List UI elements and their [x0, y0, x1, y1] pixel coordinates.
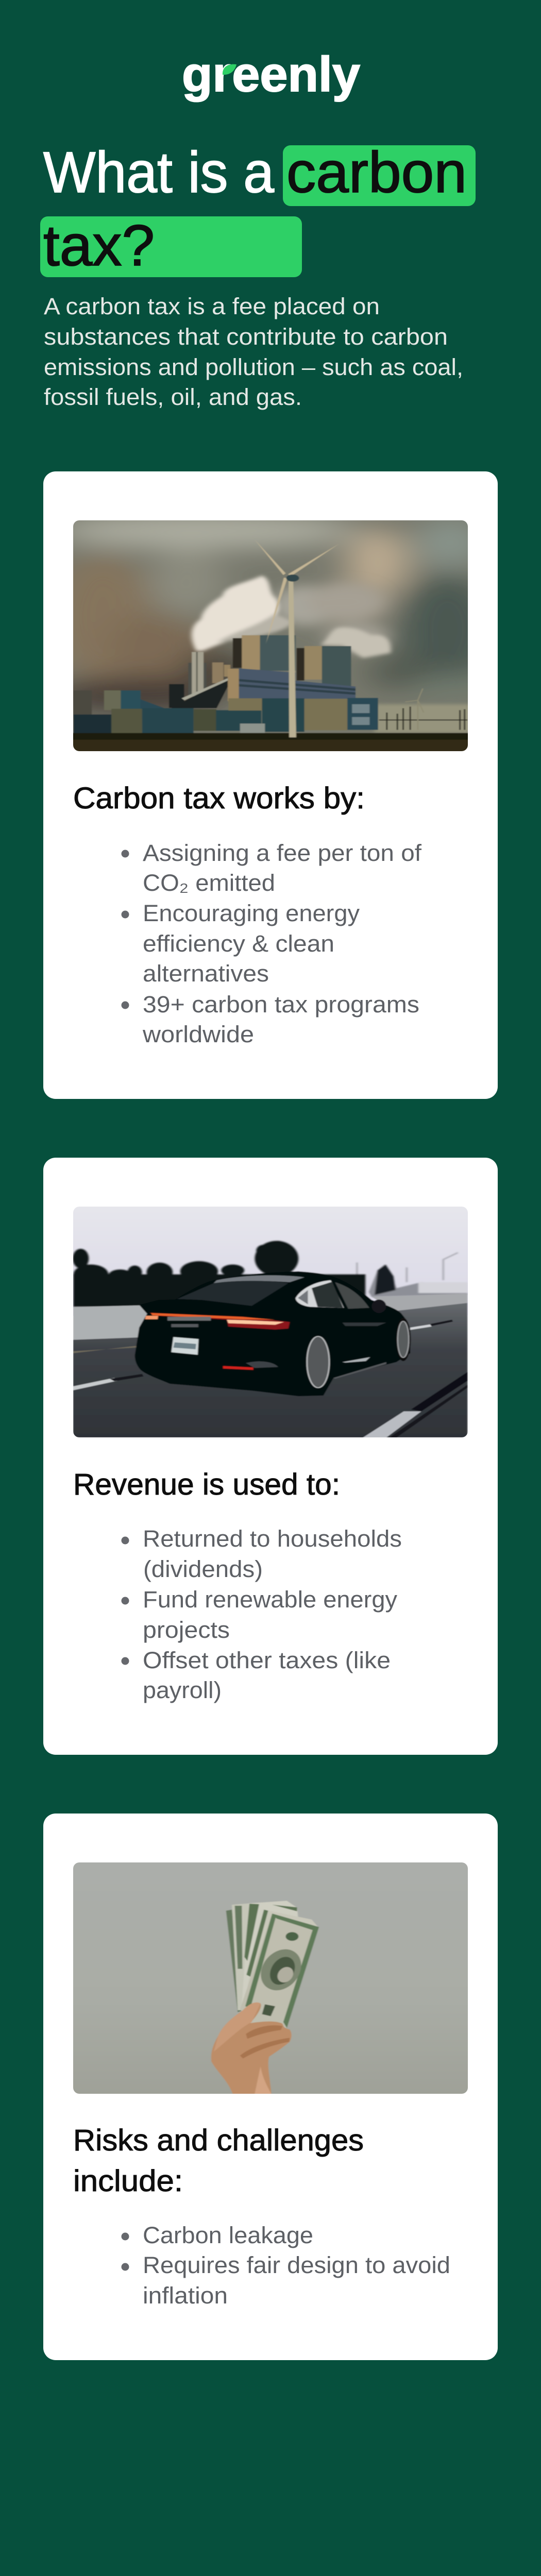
pylons: [379, 706, 467, 730]
bullet list: uses of revenue: (dividends): [143, 1556, 263, 1582]
tail lights: [149, 1313, 290, 1330]
bullet list: carbon tax mechanisms: Assigning a fee per ton of: [143, 840, 422, 866]
bullet list: risks: [122, 2222, 450, 2309]
bullet list: risks: Carbon leakage: [143, 2222, 313, 2248]
photo: power plant and wind turbine: [73, 520, 468, 751]
highlight: carbon: [283, 145, 476, 206]
lane stripes: [73, 1378, 117, 1390]
side windows: [296, 1280, 344, 1308]
card background: [43, 471, 498, 1099]
highlight: tax: [40, 216, 302, 277]
back bills: [226, 1910, 243, 2012]
front bill: [240, 1919, 312, 2028]
bullet list: uses of revenue: projects: [143, 1617, 230, 1643]
heading: risks and challenges include: include:: [73, 2164, 183, 2198]
tree silhouette: [73, 1241, 365, 1307]
rear window: [177, 1281, 289, 1306]
smoke plume bright part: [192, 575, 391, 658]
plant buildings: [73, 690, 92, 715]
heading: risks and challenges include: Risks and challenges: [73, 2124, 364, 2157]
roof sheen: [214, 1275, 305, 1283]
panel: carbon tax works by: [43, 471, 498, 1099]
badge text marks: [167, 1317, 211, 1320]
license plate: [172, 1337, 198, 1355]
small turbine: [405, 688, 424, 721]
bullet list: carbon tax mechanisms: CO₂ emitted: [143, 870, 275, 896]
bullet list: risks: inflation: [143, 2282, 228, 2309]
intro paragraph: [44, 293, 463, 410]
hand: [211, 2003, 292, 2094]
title: [40, 140, 476, 278]
ground: [71, 733, 471, 740]
photo: black car on highway: [71, 1206, 471, 1437]
bullet list: uses of revenue: Offset other taxes (like: [143, 1647, 391, 1673]
background roadside: [357, 1252, 467, 1297]
intro paragraph: fossil fuels, oil, and gas.: [44, 384, 302, 410]
intro paragraph: A carbon tax is a fee placed on: [44, 293, 380, 319]
mirror and door sheen: [371, 1299, 386, 1313]
bullet list: carbon tax mechanisms: efficiency & clean: [143, 930, 334, 957]
intro paragraph: substances that contribute to carbon: [44, 324, 448, 350]
intro paragraph: emissions and pollution – such as coal,: [44, 354, 463, 380]
horizon band: [375, 704, 471, 733]
icon: green leaf on logo: [223, 64, 236, 75]
card background: [43, 1158, 498, 1755]
panel: revenue is used to: [43, 1158, 498, 1755]
bullet list: uses of revenue: Fund renewable energy: [143, 1586, 398, 1613]
bullet list: carbon tax mechanisms: 39+ carbon tax programs: [143, 991, 419, 1018]
bullet list: carbon tax mechanisms: [122, 840, 422, 1047]
bullet list: carbon tax mechanisms: Encouraging energy: [143, 900, 360, 926]
photo: hand holding dollar bills: [71, 1861, 471, 2095]
main turbine: [289, 580, 296, 737]
road surface: [73, 1303, 467, 1437]
bullet list: uses of revenue: Returned to households: [143, 1526, 402, 1552]
title word tax: tax?: [43, 213, 155, 278]
bullet list: carbon tax mechanisms: alternatives: [143, 960, 269, 987]
card background: [43, 1814, 498, 2360]
heading: carbon tax works by: Carbon tax works by:: [73, 782, 365, 815]
car body: [135, 1272, 410, 1396]
smoke plume soft right part: [272, 584, 389, 651]
heading: risks and challenges include: [73, 2124, 364, 2198]
title line 1 white: What is a: [43, 140, 275, 205]
heading: revenue is used to: Revenue is used to:: [73, 1468, 340, 1501]
bullet list: uses of revenue: [122, 1526, 402, 1703]
panel: risks and challenges: [43, 1814, 498, 2360]
logo: greenly: greenly: [182, 47, 360, 102]
title word carbon: carbon: [286, 140, 467, 205]
bullet list: uses of revenue: payroll): [143, 1677, 222, 1703]
concrete walls: [73, 1305, 164, 1340]
wheels: [305, 1336, 331, 1386]
bullet list: carbon tax mechanisms: worldwide: [142, 1021, 254, 1047]
bullet list: risks: Requires fair design to avoid: [143, 2252, 450, 2278]
